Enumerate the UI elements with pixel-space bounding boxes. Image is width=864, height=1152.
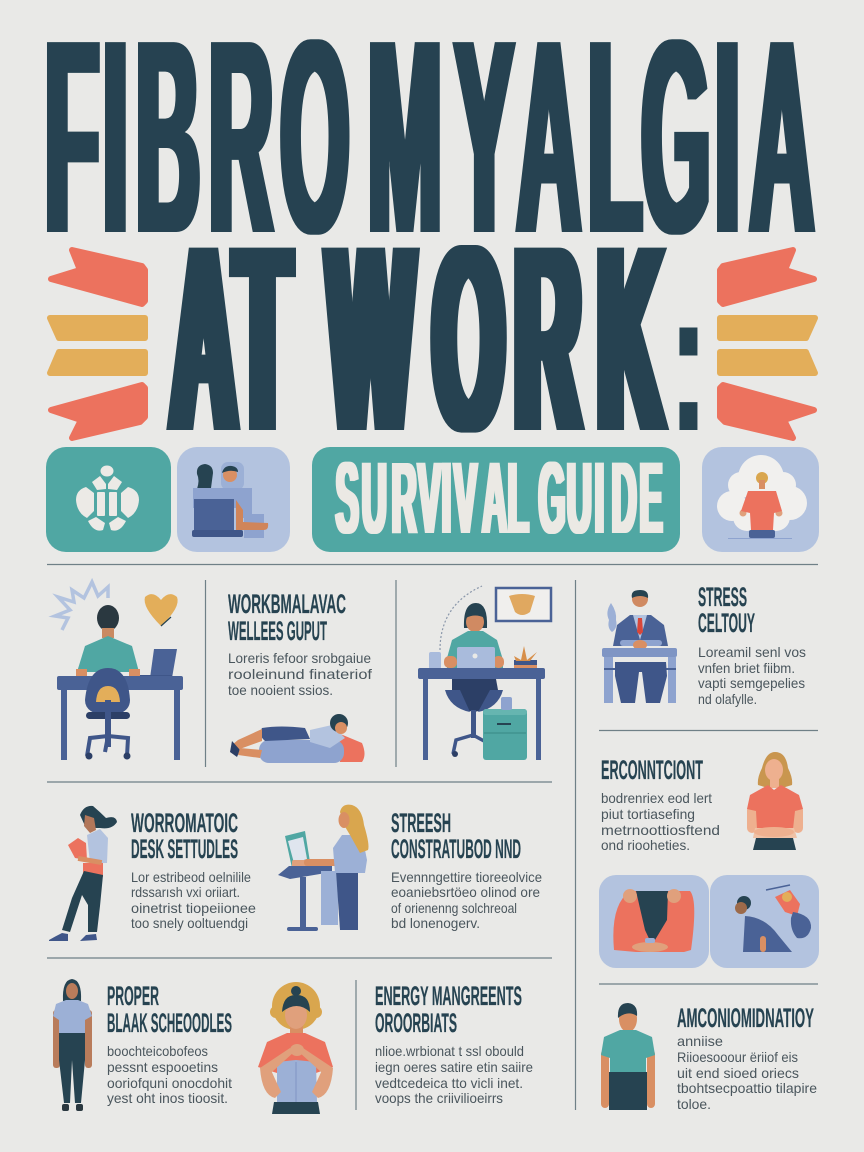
- text block: proper break schedules: pessnt espooetins: [107, 1059, 218, 1075]
- text block: encountering: bodrenriex eod lert: [601, 790, 712, 806]
- text block: stress: nd olafylle.: [698, 691, 757, 707]
- banner: survival guide: SURVIVAL GUIDE: [336, 442, 663, 556]
- text block: accommodations: anniise: [677, 1033, 723, 1049]
- text block: ergonomic desk setups: WORROMATOIC: [131, 808, 238, 838]
- text block: accommodations: [677, 1003, 817, 1112]
- text block: workplace wellness: WORKBMALAVAC: [228, 589, 346, 619]
- illustration: woman at laptop with filing cabinet: [418, 586, 551, 760]
- text block: ergonomic desk setups: too snely ooltuendgi: [131, 915, 248, 931]
- text block: stress: CELTOUY: [698, 608, 755, 638]
- text block: accommodations: toloe.: [677, 1096, 711, 1112]
- illustration: man standing in teal shirt: [601, 1003, 655, 1110]
- text block: encountering: ERCONNTCIONT: [601, 755, 703, 785]
- illustration: man in suit at desk: [602, 590, 677, 703]
- text block: stress: [698, 582, 806, 707]
- icon tile: two colleagues at a laptop: [177, 447, 290, 552]
- text block: stress constraints: STREESH: [391, 808, 451, 838]
- illustration: woman with folded hands: [747, 752, 803, 850]
- text block: ergonomic desk setups: [131, 808, 256, 931]
- text block: proper break schedules: [107, 981, 232, 1106]
- icon tile: turtle shell: [46, 447, 171, 552]
- icon tile: person with back pain: [710, 875, 819, 968]
- text block: proper break schedules: boochteicobofeos: [107, 1043, 208, 1059]
- illustration: worker at desk from behind: [55, 582, 183, 760]
- text block: encountering: [601, 755, 720, 853]
- section dividers: [47, 564, 818, 1110]
- right ribbon burst: [720, 250, 815, 438]
- text block: stress constraints: bd lonenogerv.: [391, 915, 480, 931]
- text block: stress: vnfen briet fiibm.: [698, 660, 795, 676]
- text block: encountering: metrnoottiosftend: [601, 822, 720, 838]
- text block: accommodations: uit end sioed oriecs: [677, 1065, 799, 1081]
- text block: workplace wellness: rooleinund finateriof: [228, 666, 372, 682]
- text block: stress: STRESS: [698, 582, 747, 612]
- text block: stress: Loreamil senl vos: [698, 644, 806, 660]
- illustration: woman with ponytail holding her side: [49, 806, 117, 941]
- illustration: woman with curly hair holding hands together: [258, 982, 333, 1114]
- text block: energy management: ENERGY MANGREENTS: [375, 981, 522, 1011]
- text block: workplace wellness: toe nooient ssios.: [228, 682, 333, 698]
- icon tile: person in stress cloud: [702, 447, 819, 552]
- text block: encountering: piut tortiasefing: [601, 806, 695, 822]
- illustration: person resting on floor: [230, 714, 364, 763]
- infographic canvas: BLAAK SCHEOODLES: [107, 1008, 232, 1038]
- text block: workplace wellness: [228, 589, 372, 698]
- text block: stress: vapti semgepelies: [698, 675, 805, 691]
- text block: proper break schedules: ooriofquni onocdohit: [107, 1075, 232, 1091]
- text block: ergonomic desk setups: rdssarısh vxi oriiart.: [131, 884, 240, 900]
- text block: encountering: ond riooheties.: [601, 837, 690, 853]
- text block: energy management: nlioe.wrbionat t ssl obould: [375, 1043, 524, 1059]
- text block: stress constraints: [391, 808, 542, 931]
- illustration: blonde woman at standing desk: [278, 805, 368, 931]
- text block: accommodations: tbohtsecpoattio tilapire: [677, 1080, 817, 1096]
- text block: accommodations: Riioesooour ëriiof eis: [677, 1049, 798, 1065]
- title: [45, 0, 814, 486]
- illustration: woman standing: [53, 979, 92, 1111]
- text block: workplace wellness: WELLEES GUPUT: [228, 616, 327, 646]
- text block: proper break schedules: yest oht inos tioosit.: [107, 1090, 228, 1106]
- text block: energy management: iegn oeres satire etin saiire: [375, 1059, 533, 1075]
- text block: ergonomic desk setups: DESK SETTUDLES: [131, 834, 238, 864]
- title: :: [667, 246, 710, 473]
- text block: ergonomic desk setups: Lor estribeod oelnilile: [131, 869, 251, 885]
- text block: ergonomic desk setups: oinetrist tiopeiionee: [131, 900, 256, 916]
- title: AT WORK: [171, 190, 663, 486]
- icon tile: person hunched seen from above: [599, 875, 709, 968]
- text block: stress constraints: of orienenng solchreoal: [391, 900, 517, 916]
- text block: proper break schedules: PROPER: [107, 981, 159, 1011]
- text block: energy management: vedtcedeica tto vicli inet.: [375, 1075, 523, 1091]
- text block: energy management: OROORBIATS: [375, 1008, 457, 1038]
- text block: stress constraints: CONSTRATUBOD NND: [391, 834, 521, 864]
- text block: stress constraints: eoaniebsrtöeo olinod ore: [391, 884, 540, 900]
- text block: energy management: voops the criivilioeirrs: [375, 1090, 503, 1106]
- left ribbon burst: [50, 250, 145, 438]
- text block: workplace wellness: Loreris fefoor srobgaiue: [228, 650, 371, 666]
- text block: energy management: [375, 981, 533, 1106]
- text block: stress constraints: Evennngettire tioreeolvice: [391, 869, 542, 885]
